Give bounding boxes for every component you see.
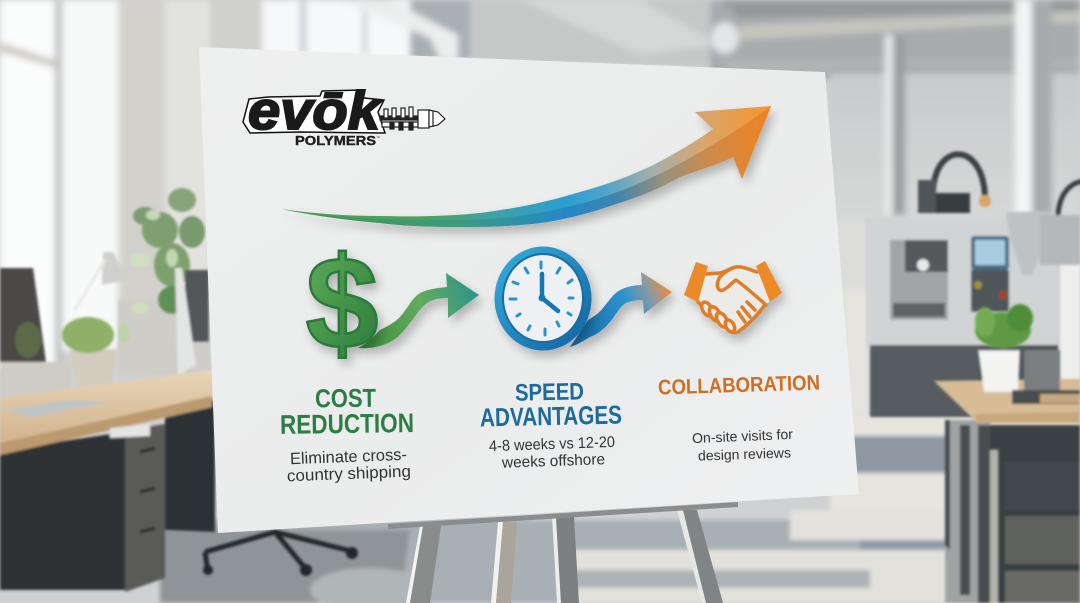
heading: cost reduction: REDUCTION	[280, 408, 414, 440]
column 1: cost reduction	[280, 229, 479, 485]
big rising arrow	[282, 106, 771, 227]
icon: clock	[494, 246, 592, 350]
heading: cost reduction	[280, 383, 414, 440]
text: collaboration description	[692, 426, 794, 464]
blurred machine	[866, 154, 1080, 417]
heading: speed advantages	[480, 378, 622, 432]
logo: evok polymers: POLYMERS	[295, 133, 376, 148]
text: cost description	[287, 446, 411, 485]
text: cost description: country shipping	[287, 463, 411, 485]
left desk, monitor, lamp and plants	[0, 188, 358, 592]
text: speed description: weeks offshore	[501, 451, 605, 472]
right desk with plant	[934, 304, 1080, 603]
text: speed description	[489, 434, 616, 472]
logo screw	[380, 107, 445, 130]
column 3: collaboration	[658, 261, 820, 464]
column 2: speed advantages	[480, 246, 672, 472]
heading: cost reduction: COST	[315, 383, 376, 413]
floor bands	[160, 413, 1080, 603]
logo: evok polymers: evōk	[248, 81, 383, 141]
logo: evok polymers: ™	[376, 135, 380, 140]
arrow: green to clock	[358, 273, 479, 348]
text: collaboration description: On-site visits for	[692, 426, 794, 446]
logo: evok polymers	[243, 81, 445, 148]
text: collaboration description: design reviews	[698, 444, 791, 464]
text: cost description: Eliminate cross-	[290, 446, 407, 468]
text: speed description: 4-8 weeks vs 12-20	[489, 434, 616, 455]
arrow: blue to handshake	[570, 272, 672, 347]
heading: speed advantages: SPEED	[515, 378, 584, 407]
icon: handshake	[684, 261, 782, 334]
board	[199, 47, 859, 533]
heading: speed advantages: ADVANTAGES	[480, 399, 622, 432]
easel legs and tray	[388, 502, 738, 603]
icon: dollar sign: $	[306, 229, 378, 376]
heading: collaboration: COLLABORATION	[658, 371, 820, 400]
